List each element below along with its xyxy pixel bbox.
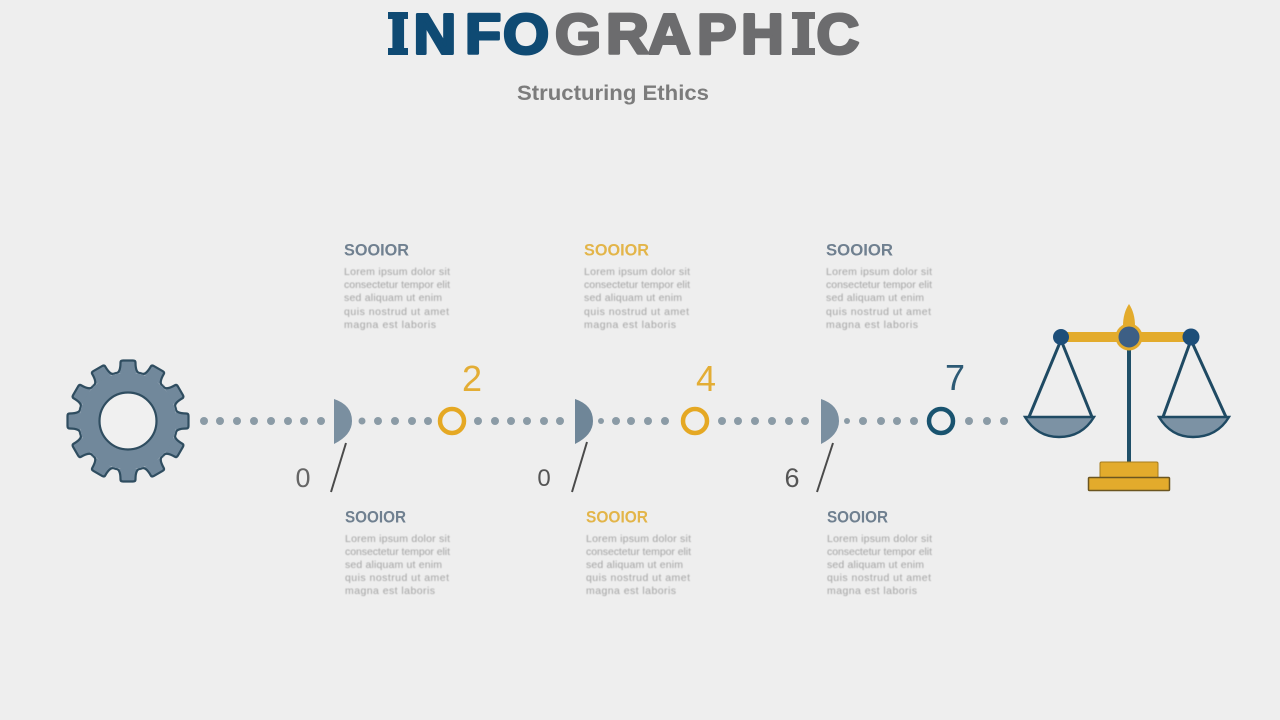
text block: bottom 1: quis nostrud ut amet — [345, 572, 449, 584]
text block: top 1: magna est laboris — [344, 319, 436, 331]
title — [388, 3, 859, 66]
text block: top 3: sed aliquam ut enim — [826, 292, 924, 304]
text block: top 1: Lorem ipsum dolor sit — [344, 266, 450, 278]
text block: top 1: sed aliquam ut enim — [344, 292, 442, 304]
ring 4 — [683, 409, 707, 433]
number 0 second: 0 — [537, 465, 551, 492]
number 6: 6 — [784, 463, 800, 493]
text block: bottom 2: SOOIOR — [586, 508, 648, 526]
number 7: 7 — [945, 357, 965, 398]
text block: top 3: SOOIOR — [826, 240, 893, 260]
text block: bottom 2: Lorem ipsum dolor sit — [586, 533, 691, 545]
dotted timeline — [200, 417, 1008, 425]
text block: top 1: SOOIOR — [344, 240, 409, 260]
number 4: 4 — [696, 358, 716, 399]
marker: half circle 3 — [821, 399, 839, 444]
text block: bottom 3: sed aliquam ut enim — [827, 559, 924, 571]
text block: bottom 3: SOOIOR — [827, 508, 888, 526]
text block: top 1: consectetur tempor elit — [344, 279, 450, 291]
text block: bottom 3: Lorem ipsum dolor sit — [827, 533, 932, 545]
title: INFO — [390, 3, 549, 66]
text block: top 2: SOOIOR — [584, 240, 649, 260]
icon: gear — [68, 360, 188, 482]
text block: top 2: Lorem ipsum dolor sit — [584, 266, 690, 278]
number 2: 2 — [462, 358, 482, 399]
text block: bottom 3 — [827, 508, 932, 597]
text block: bottom 2: sed aliquam ut enim — [586, 559, 683, 571]
text block: top 3: magna est laboris — [826, 319, 918, 331]
slash 1 — [331, 443, 346, 492]
text block: bottom 2 — [586, 508, 691, 597]
subtitle: Structuring Ethics — [517, 82, 709, 105]
marker: half circle 1 — [334, 399, 352, 444]
number 0: 0 — [295, 463, 311, 493]
text block: bottom 1: sed aliquam ut enim — [345, 559, 442, 571]
text block: bottom 2: consectetur tempor elit — [586, 546, 691, 558]
text block: top 3 — [826, 240, 932, 331]
slash 3 — [817, 443, 833, 492]
text block: top 1: quis nostrud ut amet — [344, 306, 449, 318]
text block: top 2: magna est laboris — [584, 319, 676, 331]
text block: top 2: quis nostrud ut amet — [584, 306, 689, 318]
slash 2 — [572, 442, 587, 492]
text block: top 3: Lorem ipsum dolor sit — [826, 266, 932, 278]
ring 2 — [440, 409, 464, 433]
text block: top 2: consectetur tempor elit — [584, 279, 690, 291]
text block: bottom 3: quis nostrud ut amet — [827, 572, 931, 584]
text block: bottom 2: magna est laboris — [586, 585, 676, 597]
icon: balance scale — [1025, 304, 1229, 490]
text block: bottom 2: quis nostrud ut amet — [586, 572, 690, 584]
ring 7 — [929, 409, 953, 433]
text block: bottom 1 — [345, 508, 450, 597]
text block: top 2 — [584, 240, 690, 331]
text block: bottom 1: magna est laboris — [345, 585, 435, 597]
marker: half circle 2 — [575, 399, 593, 444]
text block: top 2: sed aliquam ut enim — [584, 292, 682, 304]
text block: bottom 1: consectetur tempor elit — [345, 546, 450, 558]
title: GRAPHIC — [555, 3, 859, 66]
text block: top 3: quis nostrud ut amet — [826, 306, 931, 318]
text block: bottom 1: SOOIOR — [345, 508, 406, 526]
text block: top 1 — [344, 240, 450, 331]
text block: bottom 1: Lorem ipsum dolor sit — [345, 533, 450, 545]
text block: bottom 3: magna est laboris — [827, 585, 917, 597]
text block: top 3: consectetur tempor elit — [826, 279, 932, 291]
text block: bottom 3: consectetur tempor elit — [827, 546, 932, 558]
